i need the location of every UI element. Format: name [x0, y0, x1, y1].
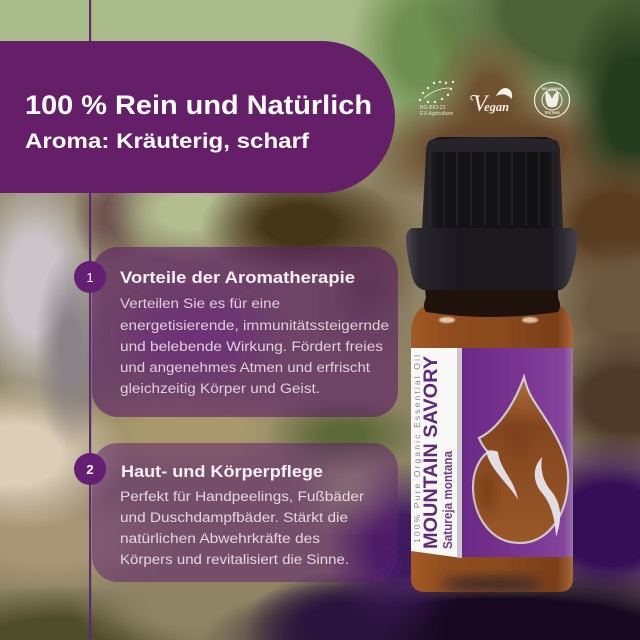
bottle base shadow: [440, 577, 544, 591]
bottle collar: [406, 228, 578, 290]
icon: EU organic logo: EU Agriculture: [420, 111, 453, 117]
icon: no animal testing logo: [534, 82, 570, 118]
text block: benefit 2 description: und Duschdampfbäder. Stärkt die: [120, 510, 348, 526]
text block: benefit 2 description: natürlichen Abwehrkräfte des: [120, 531, 320, 547]
label: MOUNTAIN SAVORY: [420, 356, 442, 549]
heading: 100 % Rein und Natürlich: 100 % Rein und Natürlich: [25, 90, 372, 120]
icon: vegan logo: Vegan: [473, 91, 509, 116]
bottle glass: [411, 305, 573, 592]
badge 1: 1: [86, 270, 94, 285]
text block: benefit 1 description: energetisierende, immunitätssteigernde: [120, 318, 389, 334]
badge 2: [74, 453, 106, 485]
bottle cap: [422, 137, 563, 228]
text block: benefit 1 description: und angenehmes Atmen und erfrischt: [120, 360, 370, 376]
subheading: aroma: Aroma: Kräuterig, scharf: [25, 129, 310, 153]
text block: benefit 1 description: [120, 296, 389, 397]
text block: benefit 1 description: gleichzeitig Körper und Geist.: [120, 381, 320, 397]
icon: no animal testing logo: NO ANIMAL: [542, 87, 563, 91]
text block: benefit 1 description: Verteilen Sie es für eine: [120, 296, 280, 312]
heading: Vorteile der Aromatherapie: Vorteile der Aromatherapie: [120, 268, 355, 287]
panel: benefit 2 skin and body care: [74, 443, 398, 582]
panel: header banner: [0, 41, 395, 193]
text block: benefit 1 description: und belebende Wirkung. Fördert freies: [120, 339, 383, 355]
icon: drop: [473, 377, 568, 543]
text block: benefit 2 description: Perfekt für Handpeelings, Fußbäder: [120, 489, 364, 505]
label text: 100% Pure Organic Essential Oil: [412, 355, 422, 543]
vertical timeline line: [89, 0, 91, 640]
label: [411, 348, 573, 558]
badge 1: [74, 261, 106, 293]
bottle neck: [424, 288, 560, 317]
text block: benefit 2 description: [120, 489, 364, 568]
icon: no animal testing logo: TESTING: [544, 111, 560, 115]
heading: Haut- und Körperpflege: Haut- und Körperpflege: [121, 462, 323, 481]
panel: benefit 1 aromatherapy: [74, 247, 398, 417]
badge 2: 2: [86, 462, 94, 477]
text block: benefit 2 description: Körpers und revitalisiert die Sinne.: [120, 552, 349, 568]
icon: EU organic logo: BG-BIO-21: [420, 105, 446, 111]
bottle: [406, 137, 578, 592]
icon: EU organic logo: [419, 81, 454, 117]
label: Satureja montana: [441, 450, 455, 549]
